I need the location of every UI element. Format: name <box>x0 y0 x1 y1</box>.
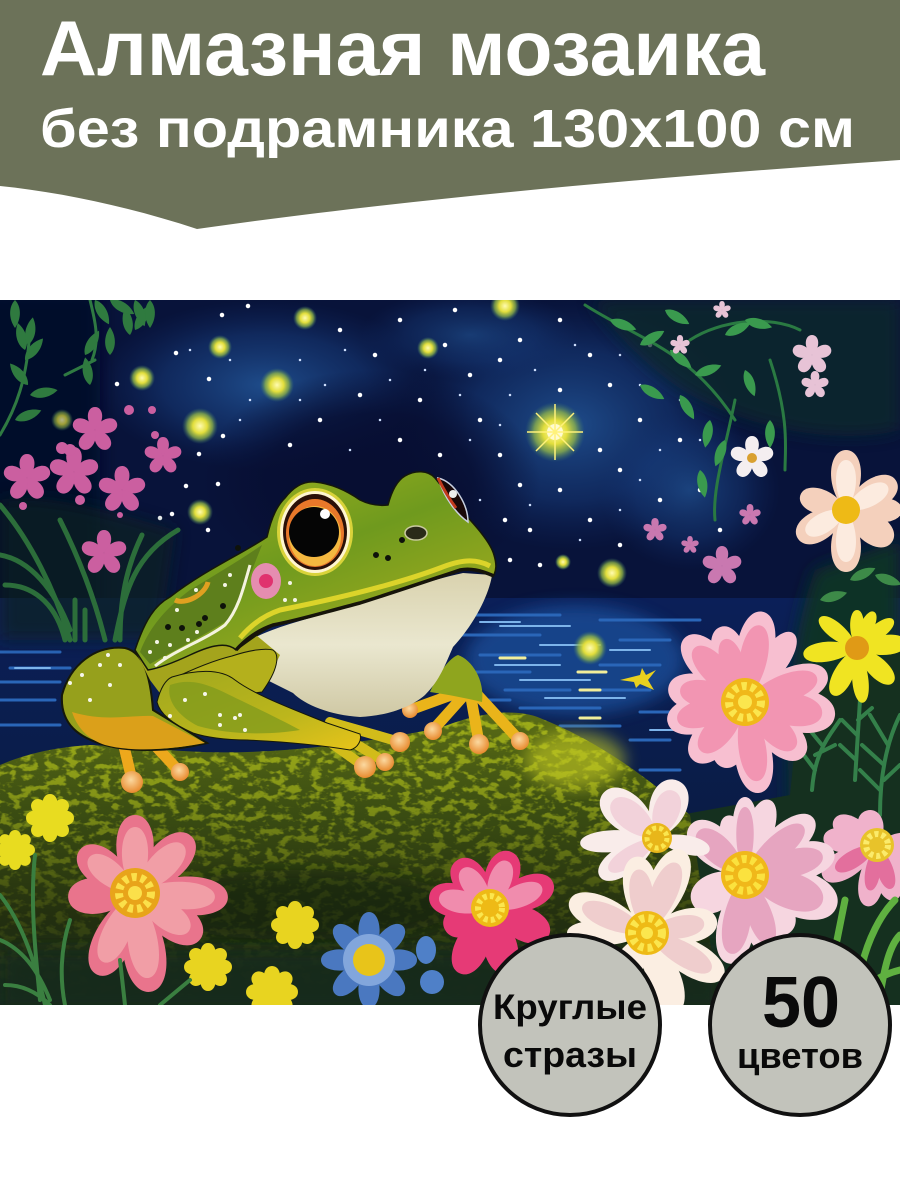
back speckles <box>150 575 295 658</box>
mouth line <box>236 569 494 650</box>
front toe tips <box>354 732 410 778</box>
far eye <box>438 478 468 522</box>
peach flower upper right <box>790 450 900 572</box>
badge: 50 colours: цветов <box>737 1035 863 1076</box>
bottom grass right <box>836 900 900 1002</box>
subtitle: без подрамника 130х100 см <box>40 99 855 159</box>
lake <box>0 598 900 838</box>
pink flower: large right <box>663 608 838 796</box>
arm speckles <box>170 694 245 730</box>
bottom grass left <box>0 855 190 1005</box>
nostril <box>405 526 427 540</box>
painting: frog at night <box>0 290 900 1019</box>
small stars <box>190 345 700 540</box>
back dark patch <box>140 545 262 664</box>
forearm mottling <box>169 682 300 733</box>
rear foot <box>119 749 179 774</box>
blue flower <box>321 912 417 1008</box>
haunch speckles <box>70 655 120 700</box>
right fern foliage <box>800 564 900 815</box>
pink flower: right edge <box>822 810 900 906</box>
right hand <box>402 655 529 754</box>
back spots <box>168 540 402 628</box>
salmon flower <box>67 815 229 995</box>
lower right dark ground <box>680 650 900 1005</box>
ear pink <box>251 563 281 599</box>
badge: round rhinestones <box>480 935 660 1115</box>
flank filler <box>137 636 280 692</box>
stars <box>117 306 720 565</box>
haunch orange fold <box>72 712 205 749</box>
back ring marking <box>175 582 208 601</box>
badge: 50 colours: 50 <box>762 963 840 1043</box>
header band <box>0 0 900 229</box>
moss hill <box>0 713 720 1010</box>
badge: round rhinestones: стразы <box>503 1034 637 1075</box>
white flower: lower <box>563 843 732 1019</box>
top right foliage <box>585 300 900 830</box>
title: Алмазная мозаика <box>40 4 766 92</box>
near eye <box>277 488 353 576</box>
rear toes <box>121 763 189 793</box>
night sky <box>0 300 900 598</box>
yellow flower right <box>802 609 900 704</box>
fireflies <box>51 291 627 588</box>
badge: 50 colours <box>710 935 890 1115</box>
hot pink flower <box>426 846 559 980</box>
lip highlight <box>240 561 490 638</box>
upper arm <box>182 648 278 693</box>
left foliage <box>0 296 183 640</box>
pink flower: centre right <box>678 796 844 967</box>
forearm <box>157 671 361 750</box>
belly <box>250 573 492 717</box>
white flower: upper <box>579 774 712 888</box>
frog <box>62 472 529 793</box>
rear haunch <box>62 648 207 750</box>
front toes <box>320 722 400 767</box>
small yellow flowers <box>0 794 319 1018</box>
back and head <box>135 472 496 670</box>
small blue buds <box>416 936 444 994</box>
back stripe <box>155 565 250 666</box>
badge: round rhinestones: Круглые <box>493 988 647 1027</box>
